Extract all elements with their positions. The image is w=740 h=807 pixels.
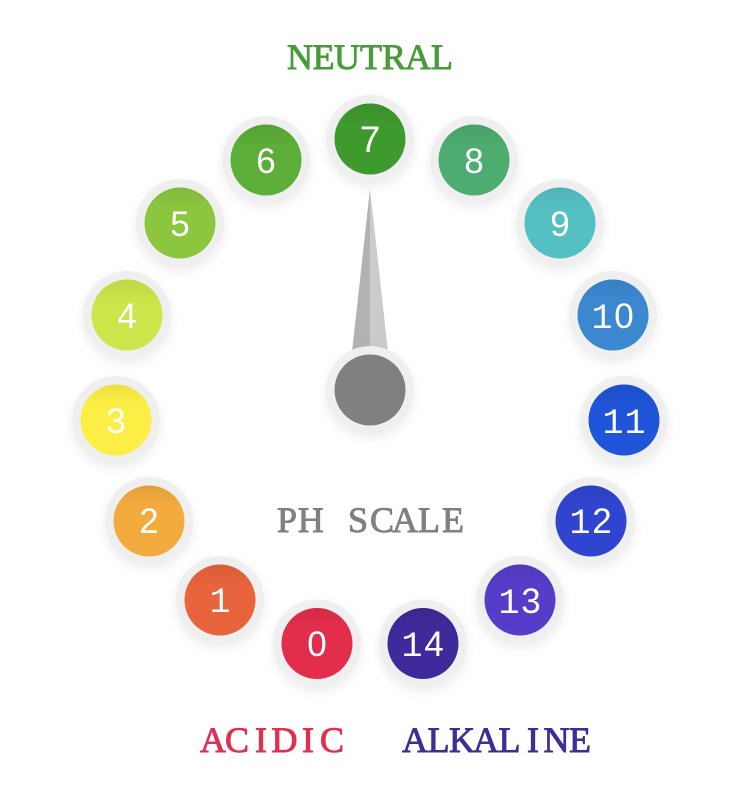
label: acidic: ACIDIC — [200, 720, 344, 760]
pH 7: 7 — [360, 119, 380, 160]
pH 0: 0 — [307, 625, 327, 664]
pH 11: 11 — [602, 404, 646, 444]
pH 14 — [379, 600, 467, 688]
pH 13 — [476, 556, 564, 644]
pH 4: 4 — [117, 297, 137, 336]
pH 12: 12 — [569, 502, 612, 544]
pH 1: 1 — [209, 583, 231, 623]
pH 3 — [72, 376, 160, 464]
pH 9 — [516, 179, 604, 267]
gauge hub — [326, 346, 414, 434]
pH 10: 10 — [591, 297, 634, 339]
pH 6: 6 — [256, 142, 276, 181]
gauge needle — [352, 189, 388, 352]
pH 2: 2 — [139, 502, 159, 541]
pH 1 — [176, 556, 264, 644]
pH 8: 8 — [464, 142, 484, 181]
pH 2 — [105, 477, 193, 565]
pH 13: 13 — [498, 582, 541, 624]
label: alkaline: ALKALINE — [402, 720, 591, 760]
pH 11 — [580, 376, 668, 464]
pH 6 — [222, 116, 310, 204]
pH 4 — [83, 271, 171, 359]
pH 14: 14 — [401, 625, 444, 667]
pH 3: 3 — [106, 402, 126, 441]
pH 9: 9 — [550, 205, 570, 244]
pH 5 — [136, 179, 224, 267]
pH 8 — [430, 116, 518, 204]
pH 5: 5 — [170, 205, 190, 244]
pH 7 — [326, 95, 414, 183]
pH 12 — [547, 477, 635, 565]
title: pH scale: PH SCALE — [277, 500, 464, 540]
pH 10 — [569, 271, 657, 359]
pH 0 — [273, 600, 361, 688]
heading: neutral: NEUTRAL — [287, 37, 453, 77]
